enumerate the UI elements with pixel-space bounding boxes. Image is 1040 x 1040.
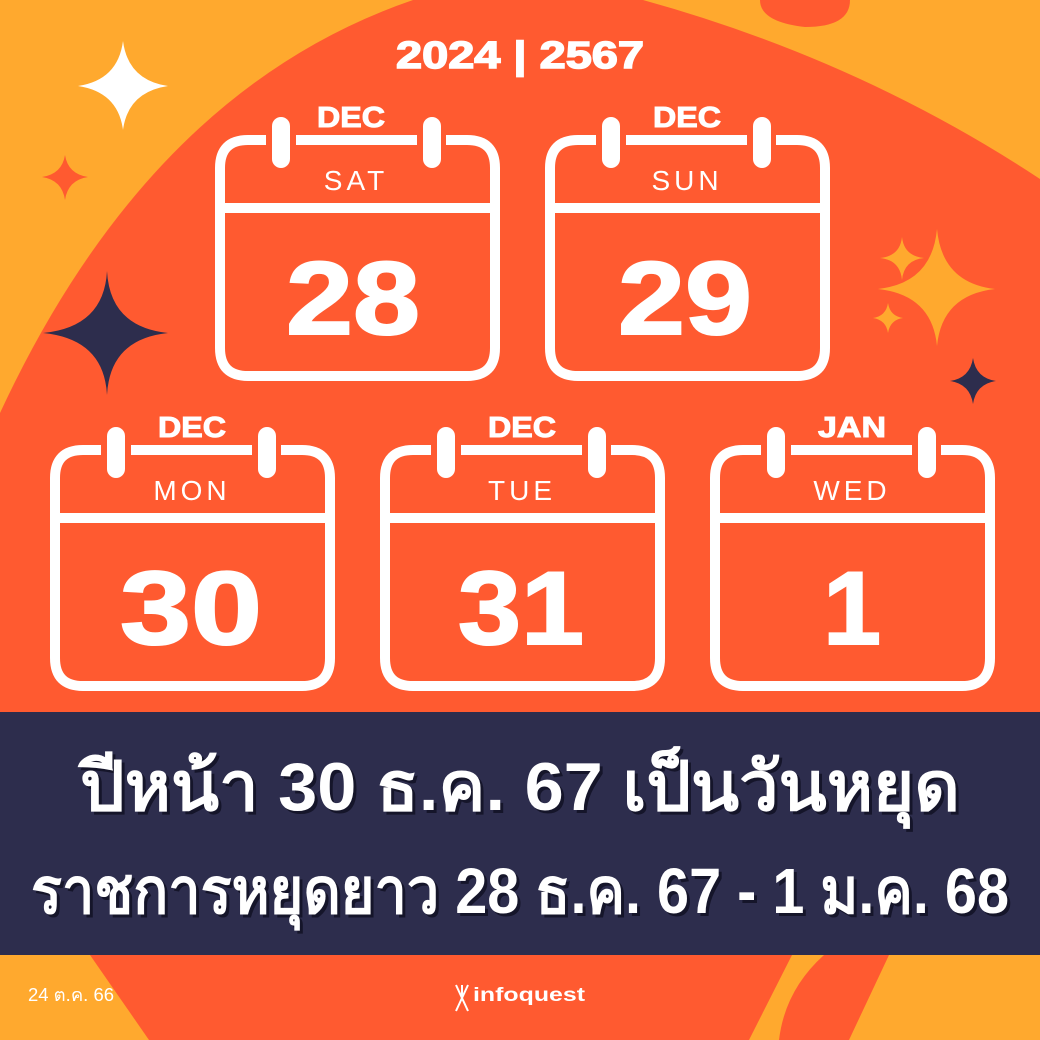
icon: yellow sparkles: [873, 229, 995, 346]
icon: white sparkle: [78, 41, 168, 130]
calendar: JAN WED 1: WED: [813, 475, 891, 506]
logo: infoquest: infoquest: [473, 985, 586, 1006]
calendar: DEC TUE 31: TUE: [488, 475, 556, 506]
calendar: DEC TUE 31: 31: [458, 551, 584, 667]
title: year: 2024 | 2567: [396, 35, 644, 77]
banner: [0, 712, 1040, 955]
calendar: DEC MON 30: MON: [153, 475, 231, 506]
calendar: DEC MON 30: DEC: [158, 412, 226, 444]
calendar: JAN WED 1: [715, 412, 990, 686]
icon: orange sparkle: [42, 155, 88, 200]
calendar: DEC SUN 29: DEC: [653, 102, 721, 134]
icon: navy small sparkle: [950, 358, 996, 404]
calendar: DEC MON 30: [55, 412, 330, 686]
calendar: DEC SUN 29: [550, 102, 825, 376]
calendar: DEC TUE 31: DEC: [488, 412, 556, 444]
calendar: JAN WED 1: 1: [823, 551, 881, 667]
headline line 1: ปีหน้า 30 ธ.ค. 67 เป็นวันหยุด: [80, 749, 963, 832]
icon: navy sparkle: [43, 271, 168, 395]
logo: infoquest: [456, 985, 586, 1011]
calendar: DEC SUN 29: SUN: [651, 165, 723, 196]
calendar: JAN WED 1: JAN: [818, 412, 886, 444]
calendar: DEC TUE 31: [385, 412, 660, 686]
calendar: DEC SAT 28: [220, 102, 495, 376]
calendar: DEC SUN 29: 29: [618, 241, 752, 357]
calendar: DEC SAT 28: DEC: [317, 102, 385, 134]
calendar: DEC MON 30: 30: [120, 551, 262, 667]
calendar: DEC SAT 28: SAT: [324, 165, 388, 196]
calendar: DEC SAT 28: 28: [286, 241, 420, 357]
date note: 24 ต.ค. 66: [28, 985, 114, 1005]
headline line 1: ปีหน้า 30 ธ.ค. 67 เป็นวันหยุด: [77, 746, 960, 829]
